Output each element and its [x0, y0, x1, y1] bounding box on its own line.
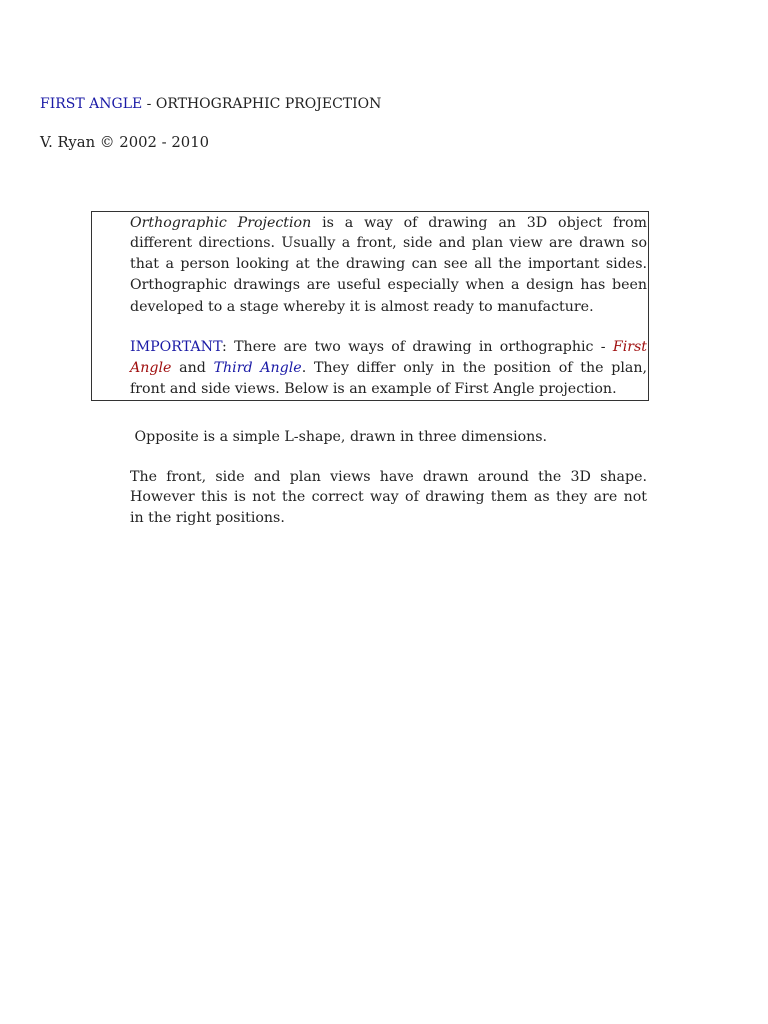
title: FIRST ANGLE - ORTHOGRAPHIC PROJECTION	[40, 96, 381, 112]
panel: intro box: IMPORTANT: There are two ways of drawing in orthographic - First	[130, 339, 647, 355]
panel: intro box: that a person looking at the drawing can see all the important sides.	[130, 256, 647, 272]
panel: intro box: developed to a stage whereby it is almost ready to manufacture.	[130, 299, 594, 315]
panel: intro box: different directions. Usually a front, side and plan view are drawn so	[130, 235, 647, 251]
panel: intro box: Orthographic Projection is a way of drawing an 3D object from	[130, 215, 647, 231]
panel: intro box	[91, 211, 649, 401]
panel: intro box: front and side views. Below is an example of First Angle projection.	[130, 381, 617, 397]
important paragraph	[128, 339, 647, 397]
panel: intro box: Angle and Third Angle. They differ only in the position of the plan,	[130, 360, 647, 376]
text: However this is not the correct way of drawing them as they are not	[130, 489, 647, 505]
text: The front, side and plan views have drawn around the 3D shape.	[130, 469, 647, 485]
text: in the right positions.	[130, 510, 285, 526]
text block: views	[130, 469, 647, 526]
intro paragraph	[130, 215, 647, 315]
author line: V. Ryan © 2002 - 2010	[40, 134, 209, 151]
panel: intro box: Orthographic drawings are useful especially when a design has been	[130, 277, 647, 293]
text block: opposite: Opposite is a simple L-shape, drawn in three dimensions.	[134, 429, 547, 445]
